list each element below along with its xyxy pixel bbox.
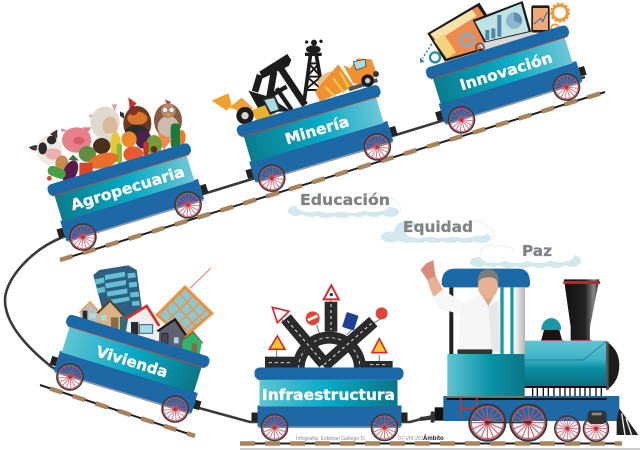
wheels — [256, 131, 393, 194]
label: Infraestructura — [262, 386, 395, 404]
wagon: Infraestructura — [252, 285, 408, 440]
label: Vivienda — [94, 342, 170, 381]
wagon body — [422, 23, 592, 139]
steam dome — [541, 318, 563, 343]
chassis — [420, 396, 638, 435]
cargo: mining machinery — [212, 40, 379, 124]
label: Minería — [283, 112, 351, 148]
president waving — [421, 260, 500, 354]
wagon: Minería — [212, 40, 403, 197]
wagon body — [43, 141, 214, 256]
cloud: Equidad: Equidad — [403, 218, 473, 236]
cab roof — [442, 269, 530, 287]
credit line — [296, 435, 444, 442]
cargo: farm animals and vegetables — [29, 97, 186, 185]
wheels — [54, 361, 191, 425]
cloud: Equidad — [381, 218, 494, 243]
credit line: Ámbito — [423, 435, 444, 442]
wagon body — [233, 83, 403, 197]
cargo: devices and gears — [420, 1, 569, 63]
locomotive — [420, 260, 638, 441]
wheels — [67, 189, 204, 253]
cloud: Paz — [470, 242, 581, 268]
credit line: 07-VIII-2015 — [398, 436, 427, 442]
wagon body — [252, 368, 408, 440]
boiler — [524, 341, 619, 398]
wheels — [445, 71, 583, 136]
cab posts — [449, 287, 525, 360]
label: Innovación — [458, 49, 555, 94]
cloud: Paz: Paz — [522, 242, 552, 260]
cab body — [447, 354, 525, 396]
cargo: roads and traffic signs — [265, 285, 393, 368]
credit line: Infografía: Esteban Gallego O. — [296, 436, 366, 442]
cloud: Educación — [288, 191, 400, 218]
wagon: Agropecuaria — [29, 97, 214, 256]
wagon: Innovación — [420, 1, 592, 139]
drive wheels — [469, 405, 609, 441]
cargo: buildings and houses — [79, 265, 214, 357]
cloud: Educación: Educación — [300, 191, 390, 209]
wagon body — [44, 313, 215, 428]
wagon: Vivienda — [44, 265, 215, 428]
wheels — [262, 414, 398, 440]
label: Agropecuaria — [69, 163, 187, 214]
chimney — [563, 279, 600, 343]
